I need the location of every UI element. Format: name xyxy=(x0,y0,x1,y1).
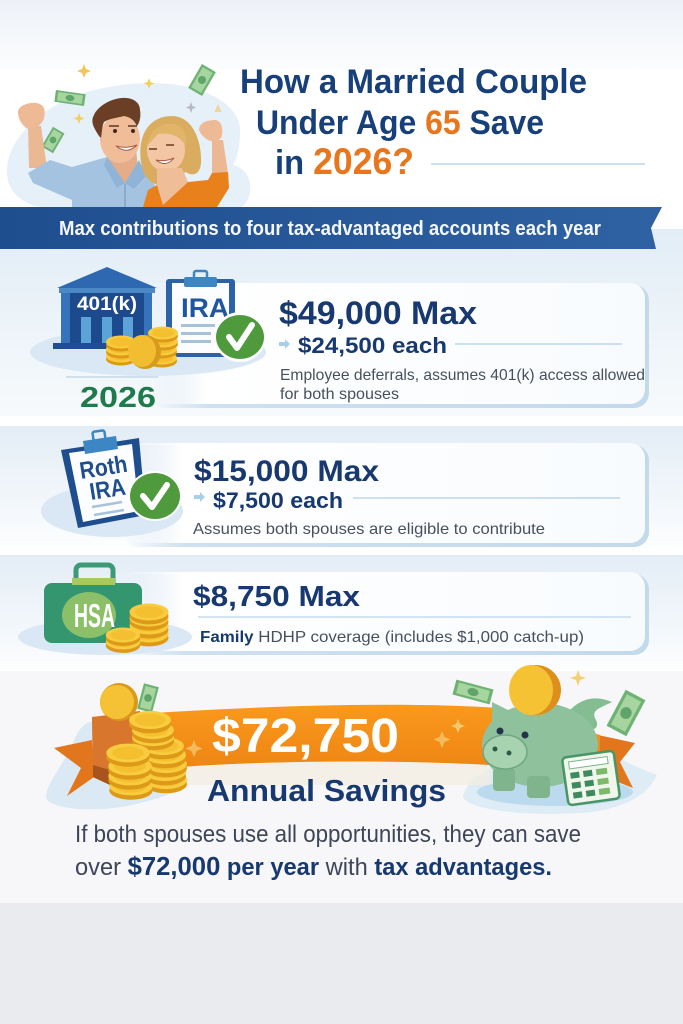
text: amounts: Family HDHP coverage (includes $1,000 catch-up) xyxy=(200,629,584,646)
woman xyxy=(140,116,229,207)
title: in 2026? xyxy=(275,141,414,182)
icon: HSA bag with coins xyxy=(18,565,192,655)
icon: IRA clipboard: IRA xyxy=(181,293,229,323)
total amount xyxy=(186,710,465,763)
text: summary: over $72,000 per year with tax advantages. xyxy=(75,851,552,881)
heading: annual savings: Annual Savings xyxy=(207,773,446,808)
icon: coin stacks xyxy=(106,711,187,800)
card xyxy=(120,572,649,655)
text: summary xyxy=(75,821,581,881)
text: amounts xyxy=(193,581,631,646)
title: Under Age 65 Save xyxy=(256,104,544,142)
text: amounts: $49,000 Max xyxy=(279,295,477,331)
icon: coin stacks xyxy=(106,326,178,369)
banner: subtitle ribbon: Max contributions to four tax-advantaged accounts each year xyxy=(59,217,601,240)
text: amounts: $15,000 Max xyxy=(194,455,379,488)
text: summary: If both spouses use all opportunities, they can save xyxy=(75,821,581,848)
icon: Roth IRA clipboard with check: Roth xyxy=(78,451,129,485)
icon: 401(k) bank: 401(k) xyxy=(77,294,137,315)
text: amounts: $7,500 each xyxy=(213,488,343,513)
title xyxy=(240,63,587,182)
icon: Roth IRA clipboard with check xyxy=(41,430,183,537)
icon: coin and bill behind stacks xyxy=(100,683,159,721)
text: amounts: $24,500 each xyxy=(298,333,447,358)
panel: Roth IRA xyxy=(41,430,649,547)
text: amounts: Assumes both spouses are eligible to contribute xyxy=(193,521,545,538)
panel: 401(k) and IRA xyxy=(30,267,649,414)
text: amounts: $8,750 Max xyxy=(193,581,360,613)
label: 2026: 2026 xyxy=(80,382,156,414)
panel: HSA xyxy=(18,565,649,655)
panel: annual savings xyxy=(46,665,657,881)
icon: HSA bag with coins: HSA xyxy=(74,597,115,634)
icon: bank and IRA clipboard with coins xyxy=(30,267,266,376)
icon: Roth IRA clipboard with check: IRA xyxy=(88,474,127,506)
man xyxy=(18,98,155,207)
text: amounts: for both spouses xyxy=(280,386,399,403)
text: amounts: Employee deferrals, assumes 401(k) access allowed xyxy=(280,367,645,384)
icon: green check xyxy=(214,312,266,362)
text: amounts xyxy=(279,295,645,403)
icon: shadow blobs xyxy=(46,722,657,814)
label: 2026 xyxy=(66,377,158,414)
icon: 401(k) bank xyxy=(53,267,157,349)
title: How a Married Couple xyxy=(240,63,587,101)
banner: subtitle ribbon xyxy=(0,207,662,249)
icon: IRA clipboard xyxy=(166,271,235,357)
icon: piggy bank with calculator xyxy=(452,665,645,805)
text: amounts xyxy=(193,455,620,538)
total amount: $72,750 xyxy=(212,710,399,763)
card xyxy=(147,283,649,408)
icon: floating money xyxy=(42,64,222,153)
card xyxy=(120,443,649,547)
ribbon xyxy=(54,705,635,796)
illustration: celebrating couple with money xyxy=(7,64,250,207)
